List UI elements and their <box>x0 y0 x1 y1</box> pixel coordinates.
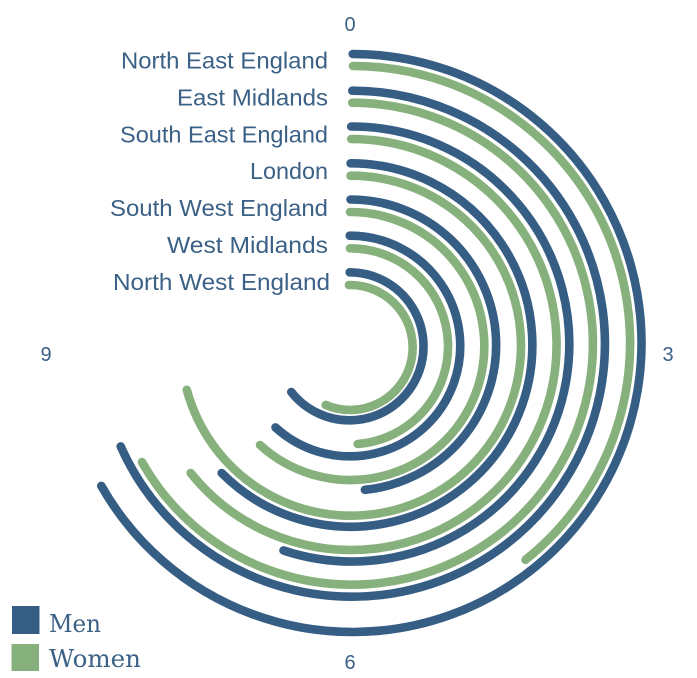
legend swatch: women <box>12 644 39 671</box>
arcs: West Midlands <box>276 236 460 456</box>
region labels: South East England <box>120 122 328 148</box>
region labels <box>110 48 330 295</box>
axis tick labels: 9 <box>40 344 52 366</box>
axis tick labels: 0 <box>344 14 356 36</box>
arcs: North West England <box>291 272 424 420</box>
region labels: West Midlands <box>167 232 328 258</box>
legend swatch: men <box>12 606 40 634</box>
arcs: South East England <box>191 126 569 561</box>
legend <box>12 606 141 673</box>
region labels: East Midlands <box>177 84 328 110</box>
axis tick labels: 3 <box>662 344 674 366</box>
axis tick labels: 6 <box>344 652 356 674</box>
region labels: North West England <box>113 269 330 295</box>
arcs: South West England <box>260 199 496 490</box>
region labels: London <box>250 158 328 184</box>
region labels: North East England <box>121 48 328 74</box>
arcs: North East England <box>101 54 641 632</box>
arcs: London <box>187 163 532 527</box>
legend label: women: Women <box>49 645 141 673</box>
arcs: East Midlands <box>121 91 605 597</box>
region labels: South West England <box>110 195 328 221</box>
legend label: men: Men <box>49 610 101 638</box>
